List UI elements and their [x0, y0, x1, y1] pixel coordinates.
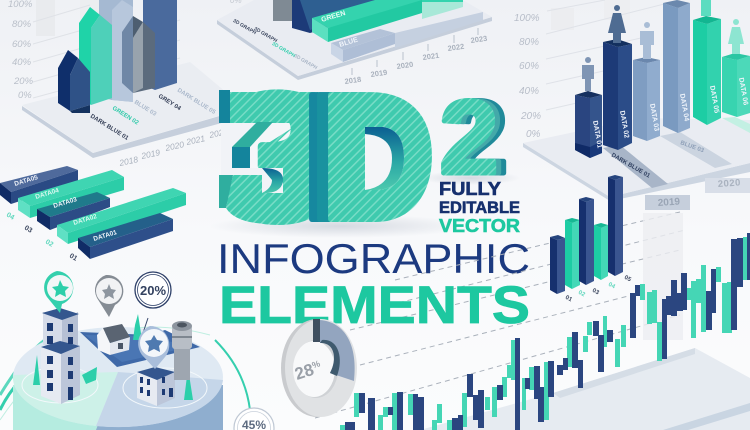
blue bar [395, 12, 483, 48]
chart: top centre horizontal bars: 2021 [422, 51, 440, 62]
bar 04: DATA04 [35, 187, 60, 201]
row labels: 3D GRAPH [253, 26, 279, 44]
column labels: 02 [577, 290, 586, 299]
industrial tower [172, 321, 192, 380]
row numbers: 03 [23, 225, 33, 235]
chart: small column chart [550, 175, 632, 304]
column labels: 03 [591, 288, 600, 297]
chart: top centre horizontal bars [217, 0, 492, 86]
year axis: 2021 [184, 133, 206, 147]
bar 04 [18, 170, 124, 218]
inner D counter [365, 127, 404, 190]
axis labels: 20% [13, 76, 34, 87]
chart: top right people bars: BLUE 03 [679, 140, 705, 155]
chart: top centre horizontal bars: 2022 [447, 42, 465, 53]
year axis: 2020 [163, 139, 185, 153]
donut highlighted slice [320, 320, 355, 381]
numeral 2: 2 [445, 80, 503, 196]
platform [22, 106, 240, 158]
chart: top left isometric house bars [8, 0, 245, 168]
column labels: 05 [623, 275, 632, 284]
data labels: DATA 06 [737, 77, 749, 106]
column labels: 04 [607, 282, 616, 291]
row numbers: 02 [44, 239, 54, 249]
bar 05 [0, 166, 78, 204]
small columns [550, 237, 557, 294]
disc side [13, 385, 223, 430]
bar 03: DATA03 [53, 196, 78, 210]
chart: top centre horizontal bars: GREEN [321, 10, 346, 24]
axis labels: 80% [519, 37, 539, 48]
donut value: % [311, 358, 321, 370]
axis labels: 40% [12, 57, 32, 68]
subtitle: fully editable vector: EDITABLE [439, 199, 520, 217]
data labels: DATA 05 [708, 85, 720, 114]
chart: top right people bars [514, 0, 750, 201]
data labels: DATA 02 [618, 110, 630, 139]
row labels [232, 18, 319, 71]
year tiles [705, 178, 750, 193]
axis labels: 40% [519, 86, 539, 97]
chart: top right people bars: 2020 [717, 177, 741, 190]
numeral 2: 2 [440, 80, 498, 196]
platform [523, 143, 750, 201]
heading: elements: ELEMENTS [219, 276, 530, 335]
map pin green [44, 271, 73, 313]
year axis [117, 126, 229, 168]
D bowl infill [350, 112, 418, 202]
extruded digit 3: 3 [222, 57, 334, 258]
series labels: GREEN 02 [111, 106, 140, 127]
chart: city disc [0, 271, 274, 430]
data labels: DATA 04 [678, 93, 690, 122]
series labels: GREY 04 [157, 94, 182, 112]
series labels: BLUE 03 [133, 100, 158, 118]
year axis: 2018 [117, 154, 139, 168]
bar 01 [78, 213, 173, 259]
year axis: 2019 [139, 147, 161, 161]
bar 02 [57, 188, 186, 244]
chart: horizontal data bars [0, 166, 186, 263]
rings on floor [22, 367, 207, 408]
subtitle: fully editable vector: FULLY [439, 179, 501, 199]
tall building [41, 308, 80, 404]
green bar [312, 0, 463, 28]
callout 20%: 20% [140, 283, 166, 298]
axis labels: 60% [12, 39, 32, 50]
person icons [582, 57, 594, 91]
axis labels: 100% [514, 13, 540, 24]
dashed guide lines [315, 212, 685, 418]
row labels: 3D GRAPH [271, 41, 297, 59]
axis labels [8, 0, 34, 101]
map pin blue [138, 326, 169, 369]
data labels: DATA 01 [591, 120, 603, 149]
bar 02: DATA02 [73, 213, 98, 227]
column labels [564, 275, 632, 304]
callout 20% [135, 272, 171, 333]
extruded letter D: D [301, 57, 417, 258]
bars [575, 0, 750, 158]
row numbers [5, 212, 78, 263]
axis labels: 60% [519, 61, 539, 72]
heading: infographic: INFOGRAPHIC [217, 235, 530, 282]
year axis: 2022 [207, 126, 229, 140]
bar 03 [37, 192, 110, 230]
disc top [13, 327, 223, 427]
inner D wall [365, 127, 404, 190]
small building [137, 367, 175, 406]
years [352, 28, 478, 75]
data labels: DATA 03 [648, 103, 660, 132]
axis labels: 0% [526, 129, 541, 140]
data labels [591, 77, 749, 149]
house bars [143, 0, 177, 90]
extruded letter D: D [309, 57, 425, 258]
chart: top centre horizontal bars: BLUE [339, 37, 359, 49]
orbit rings [0, 327, 250, 420]
map pin grey [95, 275, 123, 317]
column labels: 01 [564, 295, 573, 304]
chart: top centre horizontal bars: 2023 [470, 34, 488, 45]
row numbers: 01 [68, 253, 78, 263]
axis labels: 0% [18, 90, 32, 101]
chart: candlestick platform: 2019 [657, 196, 681, 209]
chart: top centre horizontal bars: 2020 [396, 60, 414, 71]
chart: donut 28% [281, 319, 357, 417]
heading: 3D [210, 57, 520, 258]
donut value: 28 [292, 360, 316, 384]
subtitle: fully editable vector: VECTOR [439, 216, 520, 236]
axis labels [514, 13, 541, 140]
callout 45% [234, 408, 274, 430]
digit 3 side facets [219, 90, 283, 208]
series labels: DARK BLUE 01 [89, 114, 130, 142]
small trees [33, 314, 193, 400]
chart: top right people bars: DARK BLUE 01 [610, 153, 651, 180]
extruded letter D: D [320, 57, 436, 258]
row labels: 3D GRAPH [293, 53, 319, 71]
numeral 2: 2 [450, 80, 508, 196]
subtitle: fully editable vector [439, 179, 520, 236]
axis labels: 80% [12, 19, 32, 30]
house [97, 324, 130, 355]
digit 3 front infill [226, 92, 320, 224]
chart: top centre horizontal bars: 2019 [370, 68, 388, 79]
axis labels: 20% [520, 111, 541, 122]
chart: candlestick platform [420, 195, 750, 430]
chart: candlesticks [340, 233, 750, 430]
bar 01: DATA01 [93, 229, 118, 243]
digit 3 openings [221, 123, 272, 175]
series labels: DARK BLUE 05 [176, 88, 217, 116]
bar 05: DATA05 [14, 174, 39, 188]
chart: top centre horizontal bars: 2018 [344, 75, 362, 86]
row numbers: 04 [5, 212, 15, 222]
series labels [89, 88, 217, 142]
row labels: 3D GRAPH [232, 18, 258, 36]
